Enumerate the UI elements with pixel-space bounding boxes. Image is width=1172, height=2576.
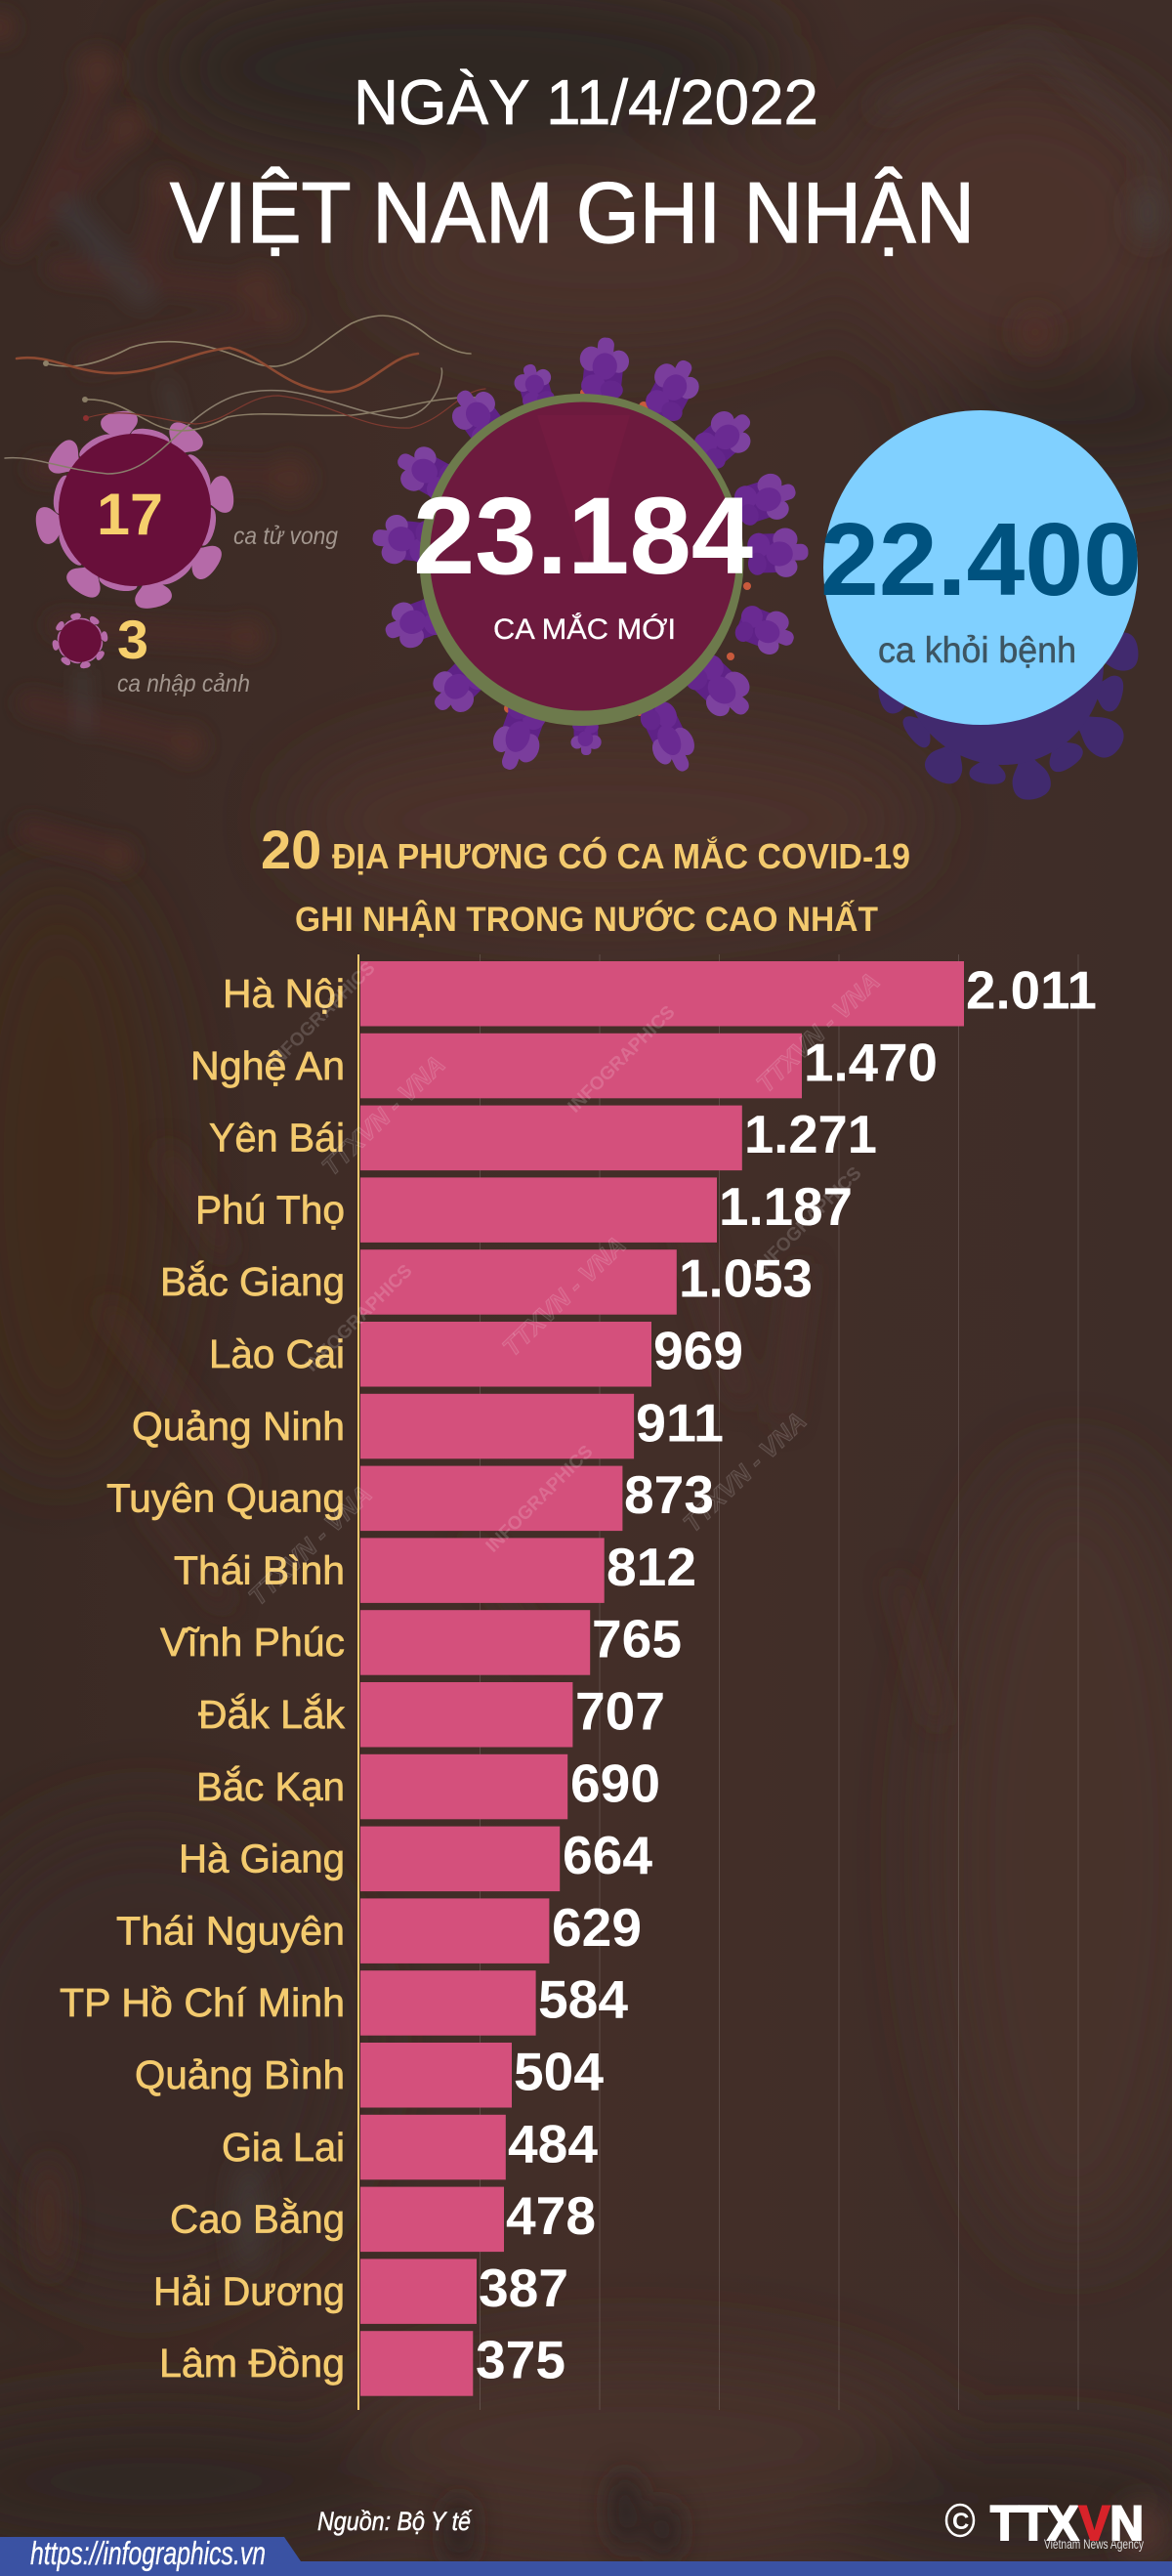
footer band with URL tab (0, 2537, 1172, 2576)
row: Quảng Ninh: Quảng Ninh (132, 1404, 345, 1449)
logo: TTXVN: TTXVN (990, 2496, 1144, 2551)
row: Thái Bình: Thái Bình (174, 1547, 345, 1592)
row: Tuyên Quang: Tuyên Quang (106, 1476, 345, 1521)
watermarks: INFOGRAPHICS (265, 958, 380, 1074)
row: Hà Nội (223, 959, 1097, 1026)
imported cases label: ca nhập cảnh (117, 670, 250, 697)
row: Bắc Kạn: 690 (570, 1753, 660, 1813)
logo: copyright mark: C (952, 2509, 969, 2535)
chart heading number: 20 (261, 819, 321, 880)
row: TP Hồ Chí Minh: 584 (538, 1969, 628, 2030)
new cases label: CA MẮC MỚI (493, 612, 676, 646)
watermarks: TTXVN - VNA (750, 966, 886, 1098)
row: Thái Bình: 812 (607, 1537, 696, 1597)
logo: copyright mark (946, 2505, 974, 2536)
row: Cao Bằng: 478 (506, 2185, 596, 2246)
watermarks: INFOGRAPHICS (751, 1163, 866, 1279)
row: Quảng Bình: Quảng Bình (135, 2052, 345, 2097)
row: Bắc Kạn: Bắc Kạn (196, 1764, 345, 1809)
row: Nghệ An (190, 1032, 938, 1098)
row: Bắc Giang (160, 1248, 813, 1315)
imported cases number: 3 (117, 609, 148, 670)
row: Cao Bằng: Cao Bằng (170, 2197, 345, 2242)
row: Đắk Lắk (198, 1680, 665, 1747)
row: Hà Giang (179, 1825, 652, 1891)
row: Yên Bái: 1.271 (744, 1104, 877, 1164)
row: TP Hồ Chí Minh: TP Hồ Chí Minh (60, 1980, 345, 2025)
row: Lào Cai: 969 (653, 1321, 743, 1381)
row: TP Hồ Chí Minh (60, 1969, 628, 2036)
source note: Nguồn: Bộ Y tế (317, 2507, 473, 2536)
virus: deaths (33, 408, 236, 612)
row: Yên Bái: Yên Bái (209, 1116, 345, 1161)
virus: recovered backdrop (875, 564, 1140, 803)
recovered label: ca khỏi bệnh (878, 630, 1076, 670)
row: Lâm Đồng (159, 2330, 565, 2396)
row: Đắk Lắk: 707 (575, 1680, 665, 1741)
row: Tuyên Quang: 873 (624, 1464, 714, 1525)
row: Quảng Ninh (132, 1392, 724, 1458)
row: Bắc Kạn (196, 1753, 660, 1819)
row: Hà Giang: 664 (563, 1825, 652, 1885)
row: Quảng Ninh: 911 (636, 1392, 724, 1453)
row: Nghệ An: Nghệ An (190, 1043, 345, 1088)
watermarks: INFOGRAPHICS (565, 1002, 680, 1118)
title: date line: NGÀY 11/4/2022 (354, 66, 818, 138)
row: Hải Dương: Hải Dương (153, 2268, 345, 2313)
row: Thái Nguyên (116, 1897, 642, 1964)
virus: new cases (370, 335, 809, 780)
deaths label: ca tử vong (233, 523, 338, 550)
row: Bắc Giang: Bắc Giang (160, 1259, 345, 1304)
row: Cao Bằng (170, 2185, 596, 2252)
watermarks: TTXVN - VNA (677, 1406, 813, 1538)
row: Thái Nguyên: 629 (552, 1897, 642, 1958)
virus: imported cases (52, 612, 108, 669)
deaths number: 17 (97, 482, 163, 547)
watermarks (242, 958, 886, 1611)
row: Lào Cai: Lào Cai (209, 1331, 345, 1376)
row: Gia Lai (222, 2113, 598, 2179)
watermarks: INFOGRAPHICS (482, 1442, 598, 1557)
row: Hà Nội: 2.011 (966, 959, 1097, 1020)
row: Nghệ An: 1.470 (804, 1032, 938, 1092)
row: Phú Thọ (195, 1176, 853, 1243)
row: Hà Nội: Hà Nội (223, 971, 345, 1016)
row: Đắk Lắk: Đắk Lắk (198, 1692, 345, 1737)
new cases number: 23.184 (413, 475, 753, 597)
watermarks: TTXVN - VNA (496, 1230, 632, 1362)
row: Vĩnh Phúc (160, 1609, 682, 1675)
row: Lâm Đồng: Lâm Đồng (159, 2341, 345, 2386)
row: Phú Thọ: 1.187 (719, 1176, 853, 1237)
row: Hải Dương (153, 2258, 568, 2324)
row: Quảng Bình (135, 2042, 604, 2108)
row: Vĩnh Phúc: Vĩnh Phúc (160, 1620, 345, 1665)
row: Bắc Giang: 1.053 (679, 1248, 813, 1309)
row: Lào Cai (209, 1321, 743, 1387)
row: Hải Dương: 387 (479, 2258, 568, 2318)
row: Lâm Đồng: 375 (476, 2330, 565, 2390)
row: Quảng Bình: 504 (514, 2042, 604, 2102)
recovered circle (823, 410, 1138, 725)
row: Phú Thọ: Phú Thọ (195, 1187, 345, 1232)
chart heading line 1 text: ĐỊA PHƯƠNG CÓ CA MẮC COVID-19 (332, 835, 910, 876)
title: main headline: VIỆT NAM GHI NHẬN (170, 164, 975, 261)
decorative wavy lines (5, 316, 485, 474)
watermarks: TTXVN - VNA (242, 1479, 378, 1611)
watermarks: TTXVN - VNA (315, 1049, 451, 1181)
row: Yên Bái (209, 1104, 877, 1170)
row: Gia Lai: Gia Lai (222, 2125, 345, 2170)
chart heading line 2: GHI NHẬN TRONG NƯỚC CAO NHẤT (295, 900, 878, 939)
footer URL: https://infographics.vn (30, 2535, 266, 2571)
bar chart (60, 954, 1097, 2410)
row: Thái Bình (174, 1537, 696, 1603)
watermarks: INFOGRAPHICS (302, 1261, 417, 1376)
row: Thái Nguyên: Thái Nguyên (116, 1908, 345, 1953)
logo: agency caption: Vietnam News Agency (1044, 2537, 1144, 2552)
row: Tuyên Quang (106, 1464, 714, 1531)
row: Vĩnh Phúc: 765 (592, 1609, 682, 1669)
recovered number: 22.400 (820, 502, 1142, 617)
row: Hà Giang: Hà Giang (179, 1837, 345, 1881)
row: Gia Lai: 484 (508, 2113, 598, 2174)
